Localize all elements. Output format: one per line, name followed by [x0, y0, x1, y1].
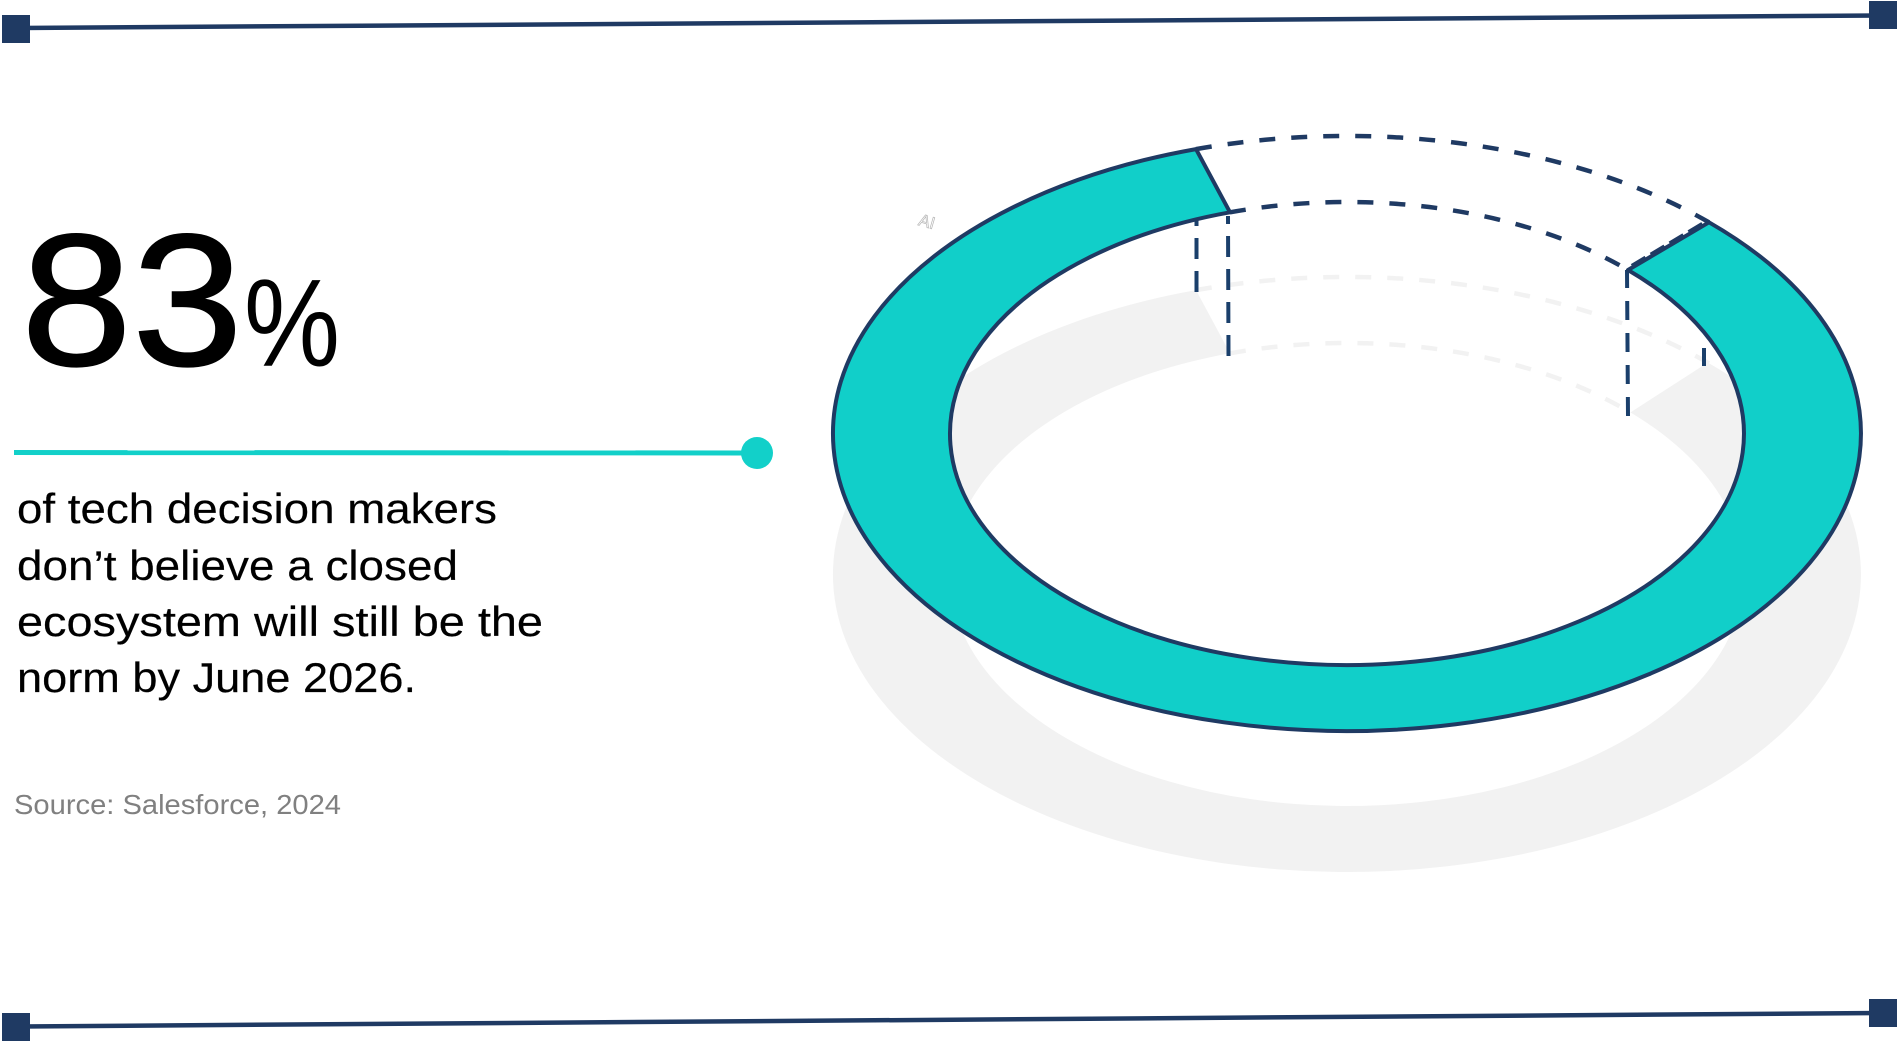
big statistic: 83%: %: [244, 255, 340, 393]
description text: ecosystem will still be the: [17, 598, 543, 645]
teal ring segment: 83%: [833, 149, 1861, 731]
description text: [17, 485, 543, 701]
description text: of tech decision makers: [17, 485, 497, 532]
big statistic: 83%: 83: [21, 195, 243, 405]
missing slice dashed outline: [1196, 136, 1709, 270]
vertical dashed drop lines: [1196, 216, 1704, 416]
ring shadow: [833, 277, 1861, 872]
big statistic: 83%: [21, 195, 340, 405]
bottom frame rule: [2, 999, 1897, 1041]
small AI mark: AI: [917, 210, 937, 233]
teal divider with dot: [14, 437, 773, 469]
dashed overlay on right slice edge: [1632, 222, 1706, 266]
top frame rule: [2, 1, 1897, 43]
source note: Source: Salesforce, 2024: [14, 789, 341, 820]
description text: don’t believe a closed: [17, 542, 458, 589]
description text: norm by June 2026.: [17, 654, 416, 701]
